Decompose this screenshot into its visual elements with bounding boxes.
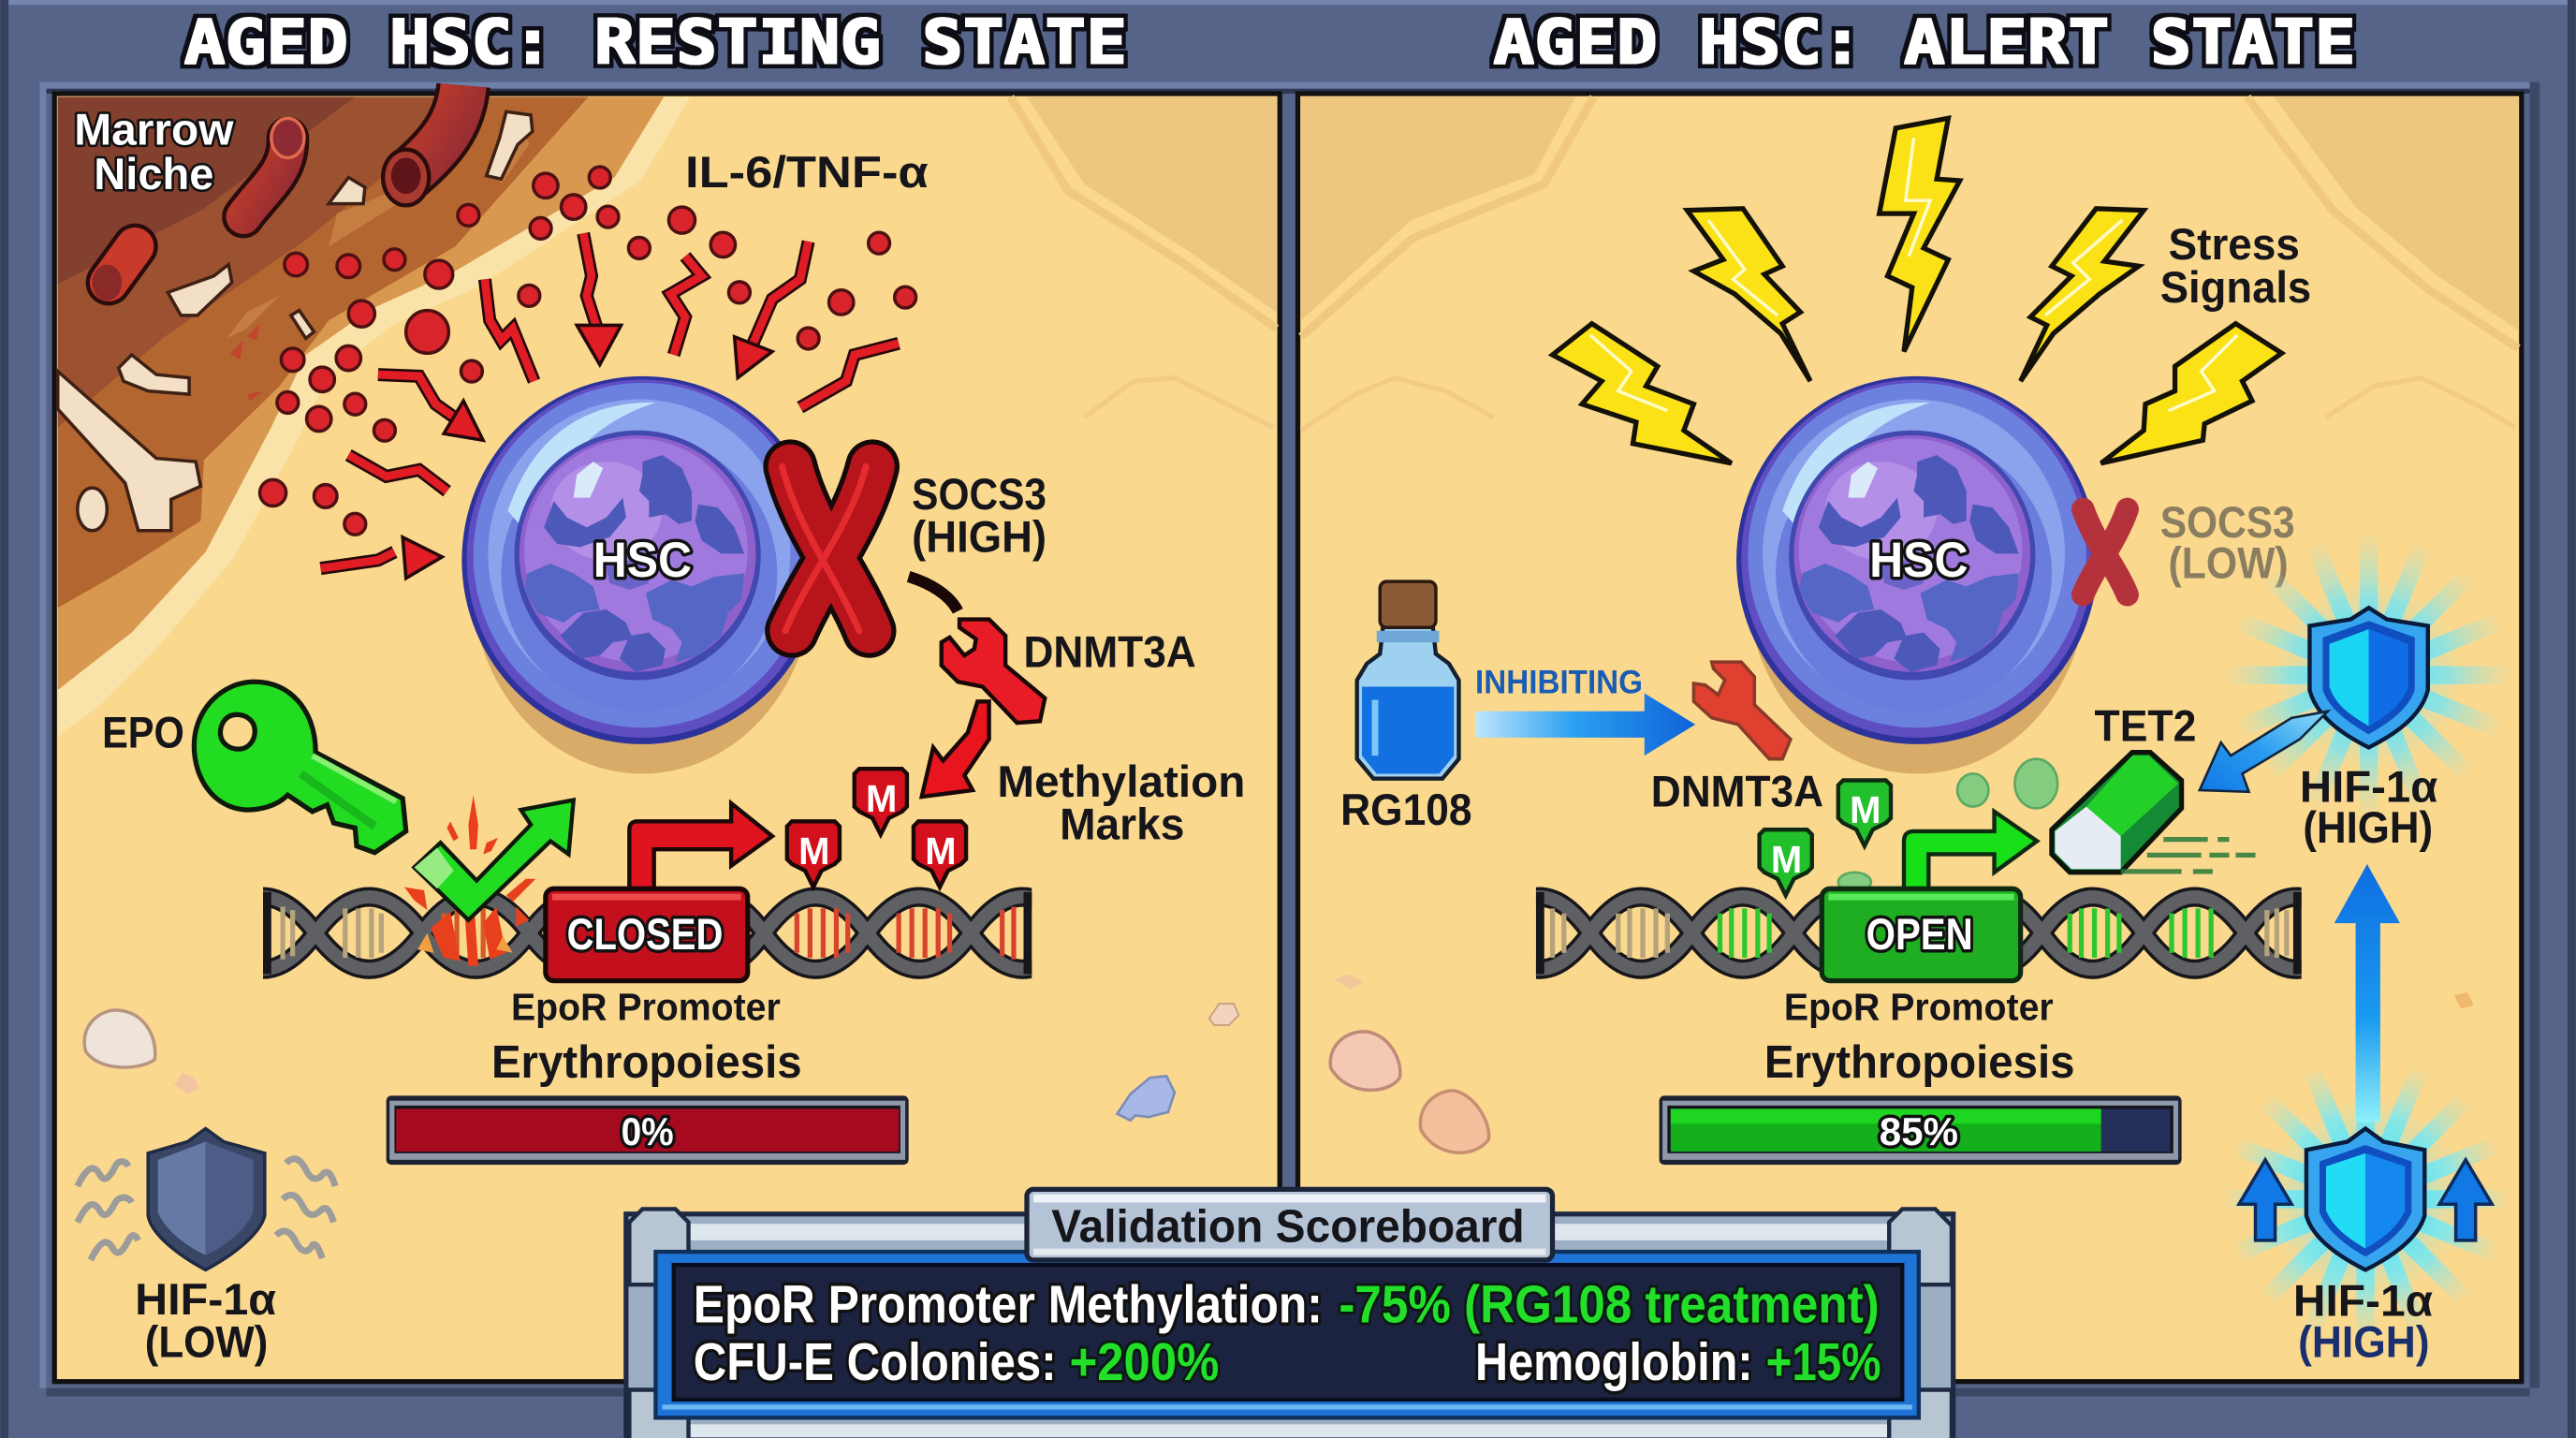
EpoR promoter label: EpoR Promoter [1784,986,2054,1029]
green pin 2: M [1771,838,1802,881]
marrow niche background [58,97,690,736]
OPEN text: OPEN [1866,910,1973,960]
HSC cell [1736,376,2098,773]
SOCS3 faded chromosome X [2083,509,2128,594]
0% value: 0% [622,1109,674,1153]
shells [84,1004,1238,1121]
scoreboard title: Validation Scoreboard [1051,1202,1525,1253]
IL-6/TNF-α label: IL-6/TNF-α [685,148,929,198]
HIF-1α high bottom label: (HIGH) [2298,1317,2430,1367]
stat: CFU-E colonies: CFU-E Colonies: [694,1332,1057,1391]
green pin 1 [1838,780,1891,846]
INHIBITING label: INHIBITING [1475,664,1643,700]
HIF-1α low label: HIF-1α [135,1275,276,1325]
closed promoter block [546,888,748,981]
HIF-1α high label [2300,762,2437,853]
cytokine dots [260,167,916,535]
sand dune shading [1301,97,2518,431]
bones [58,111,533,531]
title: resting state: AGED HSC: RESTING STATE [184,8,1127,79]
HIF-1α high label: (HIGH) [2303,803,2433,853]
scoreboard title plate [1027,1189,1553,1260]
red jagged cytokine arrows [320,233,899,579]
stress signals label: Stress [2169,220,2300,270]
blood vessels [93,85,463,301]
methylation pin 3: M [925,829,957,873]
85% value: 85% [1880,1109,1958,1153]
Erythropoiesis label: Erythropoiesis [491,1037,802,1088]
marrow niche label: Marrow [74,105,234,154]
HIF-1α high bottom label: HIF-1α [2293,1277,2433,1327]
shells [1330,975,2474,1152]
stat: EpoR promoter methylation [694,1275,1880,1334]
SOCS3 chromosome X [783,466,872,631]
open promoter block [1822,888,2021,981]
arrow: inhibiting [1475,693,1695,756]
sand dune shading [1010,97,1277,427]
top HIF-1α glowing shield [2229,536,2509,814]
panel: alert state [1298,94,2522,1382]
methylation pin 2: M [866,777,897,820]
progress bar 85% [1660,1095,2182,1165]
title: alert state: AGED HSC: ALERT STATE [1493,8,2356,79]
Erythropoiesis label: Erythropoiesis [1764,1037,2075,1088]
HSC label: HSC [593,533,692,588]
green pin 1: M [1850,788,1881,831]
HIF-1α high label: HIF-1α [2300,762,2437,812]
DNA strand right [2023,888,2302,979]
methylation marks label: Marks [1060,800,1184,850]
weak signal waves [78,1159,335,1260]
SOCS3 low label: SOCS3 [2160,498,2295,548]
progress bar 0% [387,1095,909,1165]
SOCS3 high label: SOCS3 [912,470,1046,520]
stat: hemoglobin: +15% [1766,1332,1881,1391]
dark readout [674,1265,1902,1400]
icon: RG108 bottle [1357,581,1458,779]
promoter arrow: green [1904,812,2037,888]
icon: red wrench DNMT3A [942,620,1045,723]
methylation pin 1: M [798,829,829,873]
DNMT3A label: DNMT3A [1023,627,1196,677]
HSC label: HSC [1869,533,1968,588]
SOCS3 low label [2160,498,2295,589]
CLOSED text: CLOSED [567,910,723,960]
panel: validation scoreboard [626,1189,1954,1438]
arrow: vertical HIF-1α upregulation [2334,864,2400,1122]
methylation pin 2 [855,769,907,834]
DNA strand left [1535,888,1820,979]
EPO label: EPO [102,708,184,757]
TET2 label: TET2 [2095,701,2196,751]
curved dash from SOCS3 to DNMT3A [909,577,958,611]
panel: resting state [54,85,1280,1382]
icon: TET2 eraser [2052,753,2256,873]
blue bezel [655,1252,1919,1417]
stress signals label [2160,220,2311,313]
EpoR promoter label: EpoR Promoter [511,986,781,1029]
green pin 2 [1760,829,1812,895]
methylation marks label: Methylation [997,757,1245,807]
arrow: DNMT3A to methylation marks [922,701,989,797]
panel background: sand [54,94,1280,1382]
HIF-1α low label: (LOW) [145,1317,268,1367]
RG108 label: RG108 [1340,785,1472,835]
stress signals label: Signals [2160,263,2311,313]
SOCS3 high label [912,470,1046,563]
bottom HIF-1α glowing shield [2226,1060,2505,1339]
icon: green check with spark [404,795,574,966]
small up arrows [2239,1160,2492,1240]
marrow niche label: Niche [94,150,213,199]
HSC cell [461,376,823,773]
arrow: HIF-1α to TET2 [2200,712,2328,792]
SOCS3 low label: (LOW) [2169,539,2289,589]
methylation marks label [997,757,1245,850]
stat: EpoR promoter methylation: EpoR Promoter Methylation: [694,1275,1323,1334]
promoter arrow: red [629,803,772,888]
methylation pin 3 [914,821,966,888]
HIF-1α low shield [78,1128,335,1269]
DNA strand right [750,888,1032,979]
stat: hemoglobin: Hemoglobin: [1475,1332,1753,1391]
icon: inhibited wrench [1693,662,1791,759]
marrow niche label [74,105,234,199]
DNA strand left [263,888,543,979]
methylation pin 1 [787,821,840,888]
stat: EpoR promoter methylation: -75% (RG108 treatment) [1339,1275,1880,1334]
SOCS3 high label: (HIGH) [912,513,1046,563]
icon: EPO key [194,682,406,853]
removed methyl fragments [1838,759,2057,892]
panel background: sand [1298,94,2522,1382]
lightning bolts: stress signals [1553,118,2282,463]
HIF-1α low label [135,1275,276,1367]
DNMT3A label: DNMT3A [1651,768,1823,817]
metal frame [626,1209,1954,1438]
HIF-1α high bottom label [2293,1277,2433,1367]
stat: CFU-E colonies: +200% [1070,1332,1219,1391]
